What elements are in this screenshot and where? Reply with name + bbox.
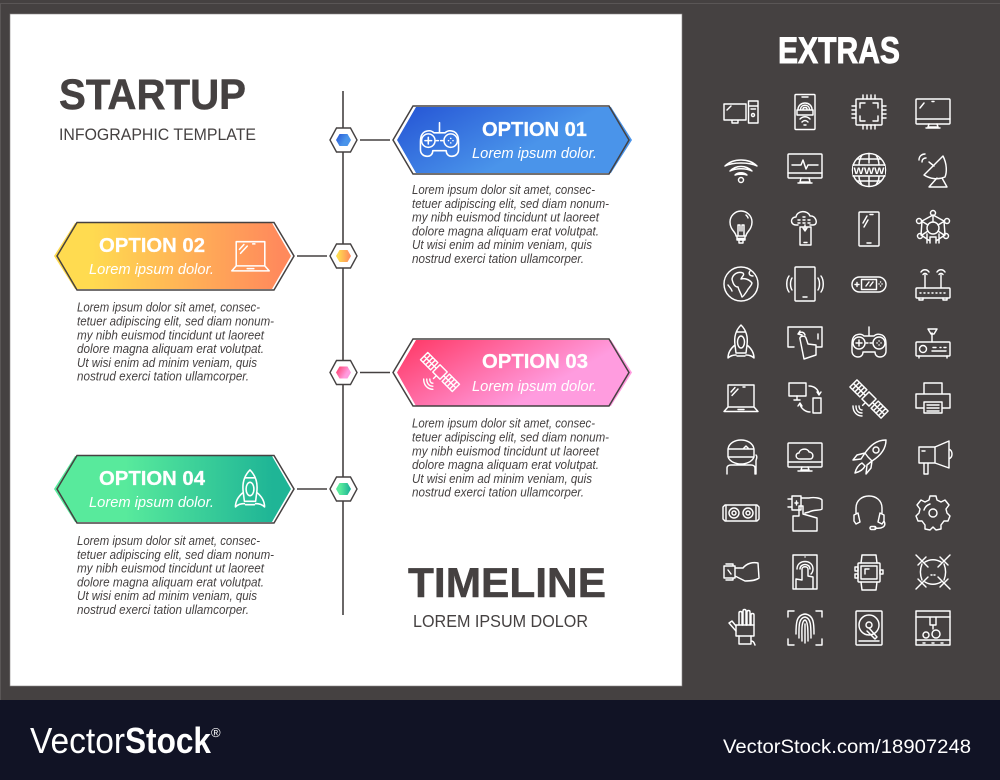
timeline heading: LOREM IPSUM DOLOR: [413, 611, 588, 631]
title: [59, 71, 256, 144]
icon: light bulb: [730, 211, 752, 243]
panel: option 03 banner: Lorem ipsum dolor.: [472, 378, 597, 395]
icon: phone vibrate: [787, 267, 823, 301]
text block: option 01: tetuer adipiscing elit, sed diam nonum-: [412, 196, 610, 211]
icon: satellite: [847, 380, 888, 421]
title: STARTUP: [59, 71, 246, 119]
text block: option 04: Ut wisi enim ad minim veniam, quis: [77, 588, 257, 603]
icon: robot hand: [729, 610, 755, 645]
icon: hard disk: [856, 611, 882, 645]
text block: option 02: [77, 300, 275, 384]
text block: option 02: nostrud exerci tation ullamcorper.: [77, 369, 249, 384]
icon: cloud to phone: [792, 212, 816, 245]
text block: option 04: tetuer adipiscing elit, sed diam nonum-: [77, 547, 275, 562]
panel: option 02 banner: Lorem ipsum dolor.: [89, 261, 214, 278]
text block: option 03: Lorem ipsum dolor sit amet, consec-: [412, 416, 596, 431]
icon: rocket: [728, 325, 754, 358]
text block: option 04: dolore magna aliquam erat volutpat.: [77, 574, 264, 589]
text block: option 03: Ut wisi enim ad minim veniam, quis: [412, 471, 592, 486]
icon: wifi: [725, 160, 757, 182]
icon: smartwatch: [855, 555, 883, 590]
panel: option 01 banner: OPTION 01: [482, 119, 587, 141]
icon: router: [916, 270, 950, 300]
panel: option 02 banner: [54, 222, 294, 290]
logo: vectorstock: [30, 720, 221, 761]
node 02: [297, 244, 357, 268]
text block: option 04: Lorem ipsum dolor sit amet, consec-: [77, 533, 261, 548]
icon: earth: [724, 267, 758, 301]
icon: wrist watch: [724, 563, 759, 581]
heading: extras: EXTRAS: [778, 29, 900, 71]
timeline heading: TIMELINE: [408, 559, 606, 606]
icon: cloud monitor: [788, 443, 822, 471]
icon: launching rocket: [853, 440, 886, 474]
icon: laptop: [724, 385, 758, 412]
icon: gamepad: [420, 123, 459, 156]
timeline axis: [342, 91, 344, 615]
text block: option 04: [77, 533, 275, 617]
icon: watch touch: [788, 496, 822, 531]
text block: option 01: Lorem ipsum dolor sit amet, consec-: [412, 182, 596, 197]
icon: vr user: [727, 440, 757, 474]
icon: satellite dish: [919, 154, 947, 187]
footer image id: VectorStock.com/18907248: [723, 737, 971, 758]
icon: touch tablet: [788, 327, 822, 359]
icon: printer: [916, 383, 950, 413]
icon: www globe: WWW: [854, 166, 885, 176]
text block: option 03: tetuer adipiscing elit, sed diam nonum-: [412, 430, 610, 444]
icon: molecule network: [916, 210, 950, 243]
icon: drone: [916, 555, 950, 589]
icon: phone fingerprint: [795, 94, 815, 130]
panel: option 04 banner: [54, 456, 294, 523]
icon: 3d printer: [916, 611, 950, 645]
node 04: [297, 477, 357, 501]
icon: cpu chip: [852, 95, 886, 129]
icon: handheld console: [852, 277, 886, 292]
icon: laptop: [232, 242, 269, 271]
footer bar: [0, 700, 1000, 780]
text block: option 03: dolore magna aliquam erat volutpat.: [412, 457, 599, 472]
text block: option 01: nostrud exerci tation ullamcorper.: [412, 251, 584, 266]
text block: option 01: dolore magna aliquam erat volutpat.: [412, 223, 599, 238]
text block: option 03: nostrud exerci tation ullamcorper.: [412, 485, 584, 500]
icon: monitor: [916, 99, 950, 128]
text block: option 03: my nibh euismod tincidunt ut laoreet: [412, 443, 600, 458]
text block: option 02: Ut wisi enim ad minim veniam, quis: [77, 355, 257, 370]
panel: option 04 banner: OPTION 04: [99, 468, 206, 490]
logo: vectorstock: Stock: [125, 720, 212, 761]
icon: satellite: [418, 353, 459, 394]
text block: option 02: tetuer adipiscing elit, sed diam nonum-: [77, 314, 275, 328]
icon: megaphone: [919, 441, 952, 474]
icon: smartphone: [859, 212, 879, 246]
panel: option 01 banner: Lorem ipsum dolor.: [472, 145, 597, 162]
icon: gear: [916, 496, 950, 530]
icon: monitor pulse: [788, 154, 822, 183]
text block: option 04: my nibh euismod tincidunt ut laoreet: [77, 561, 265, 576]
icon: www globe: [852, 154, 886, 186]
panel: option 03 banner: [393, 339, 632, 406]
icon: gamepad: [852, 327, 886, 357]
text block: option 04: nostrud exerci tation ullamcorper.: [77, 602, 249, 617]
node 03: [330, 360, 390, 384]
panel: option 03 banner: OPTION 03: [482, 351, 588, 373]
panel: option 04 banner: Lorem ipsum dolor.: [89, 494, 214, 511]
node 01: [330, 128, 390, 152]
icon: vr goggles: [723, 505, 759, 521]
icon: tablet touch: [793, 555, 817, 589]
icon: projector: [916, 329, 950, 358]
text block: option 02: Lorem ipsum dolor sit amet, consec-: [77, 300, 261, 315]
icon: desktop computer: [724, 101, 758, 123]
text block: option 03: [412, 416, 610, 500]
icon: rocket: [235, 470, 265, 507]
logo: vectorstock: Vector: [30, 720, 125, 761]
timeline heading: [408, 559, 606, 631]
text block: option 02: dolore magna aliquam erat volutpat.: [77, 341, 264, 356]
icon: sync monitor phone: [789, 383, 821, 413]
text block: option 02: my nibh euismod tincidunt ut laoreet: [77, 327, 265, 342]
panel: option 02 banner: OPTION 02: [99, 235, 205, 257]
title: INFOGRAPHIC TEMPLATE: [59, 125, 256, 144]
icon: fingerprint scan: [788, 611, 822, 645]
logo: vectorstock: ®: [211, 725, 221, 740]
panel: extras icon grid: [723, 94, 952, 645]
text block: option 01: my nibh euismod tincidunt ut laoreet: [412, 210, 600, 225]
panel: option 01 banner: [393, 106, 632, 174]
panel: white timeline sheet: [10, 14, 682, 686]
icon: headset: [854, 496, 885, 530]
text block: option 01: [412, 182, 610, 266]
text block: option 01: Ut wisi enim ad minim veniam, quis: [412, 237, 592, 252]
